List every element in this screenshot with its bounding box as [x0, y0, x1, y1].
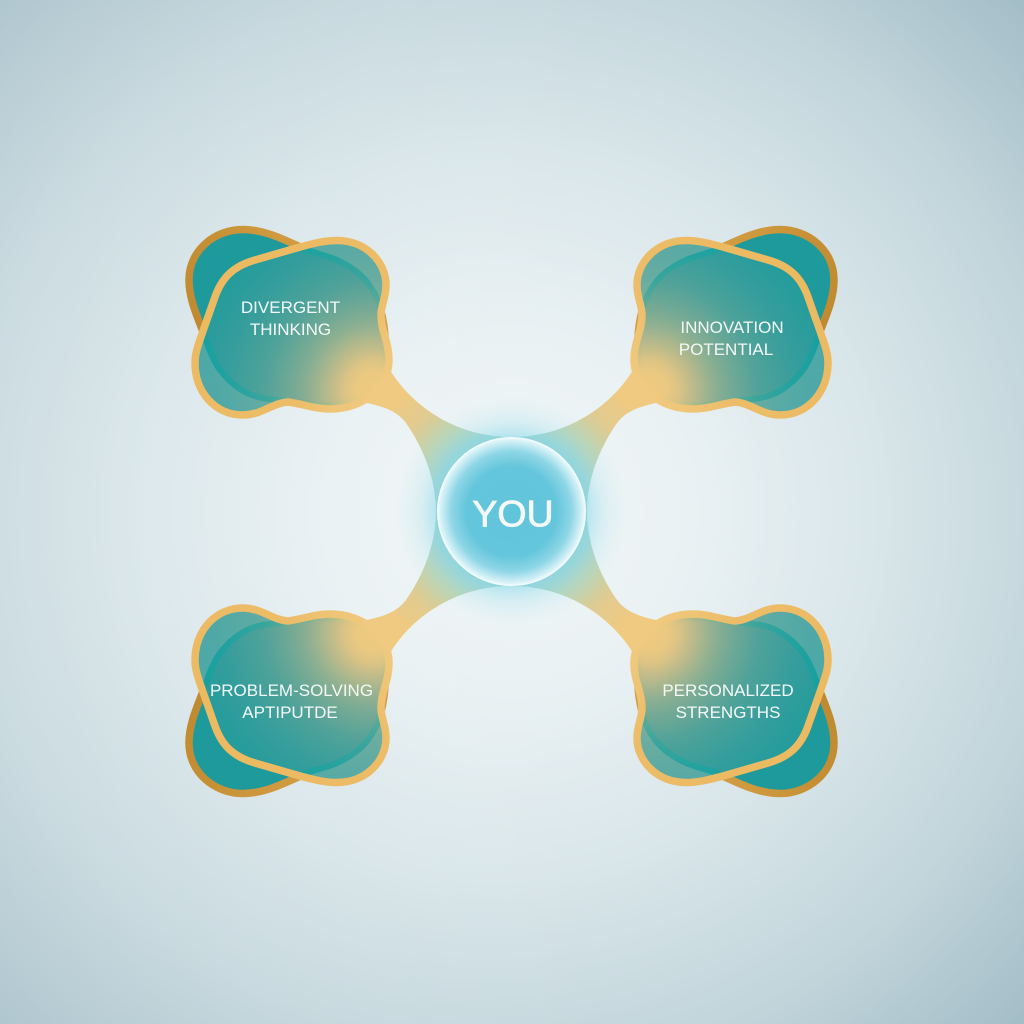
connector: gold X linking the blobs to the centre — [362, 370, 661, 653]
centre glow — [394, 394, 630, 630]
label: personalized strengths: STRENGTHS — [676, 703, 780, 722]
label: problem-solving aptitude: APTIPUTDE — [242, 703, 338, 722]
panel: innovation potential blob — [623, 220, 843, 420]
panel: divergent thinking blob — [180, 220, 400, 420]
centre node — [437, 437, 586, 586]
panel: personalized strengths blob — [623, 603, 843, 803]
centre label: YOU — [472, 492, 554, 534]
label: problem-solving aptitude: PROBLEM-SOLVING — [210, 681, 373, 700]
panel: problem-solving aptitude blob — [180, 603, 400, 803]
label: innovation potential: POTENTIAL — [679, 340, 773, 359]
label: personalized strengths: PERSONALIZED — [662, 681, 794, 700]
label: innovation potential: INNOVATION — [680, 318, 784, 337]
label: divergent thinking: THINKING — [250, 320, 331, 339]
label: divergent thinking: DIVERGENT — [241, 298, 340, 317]
